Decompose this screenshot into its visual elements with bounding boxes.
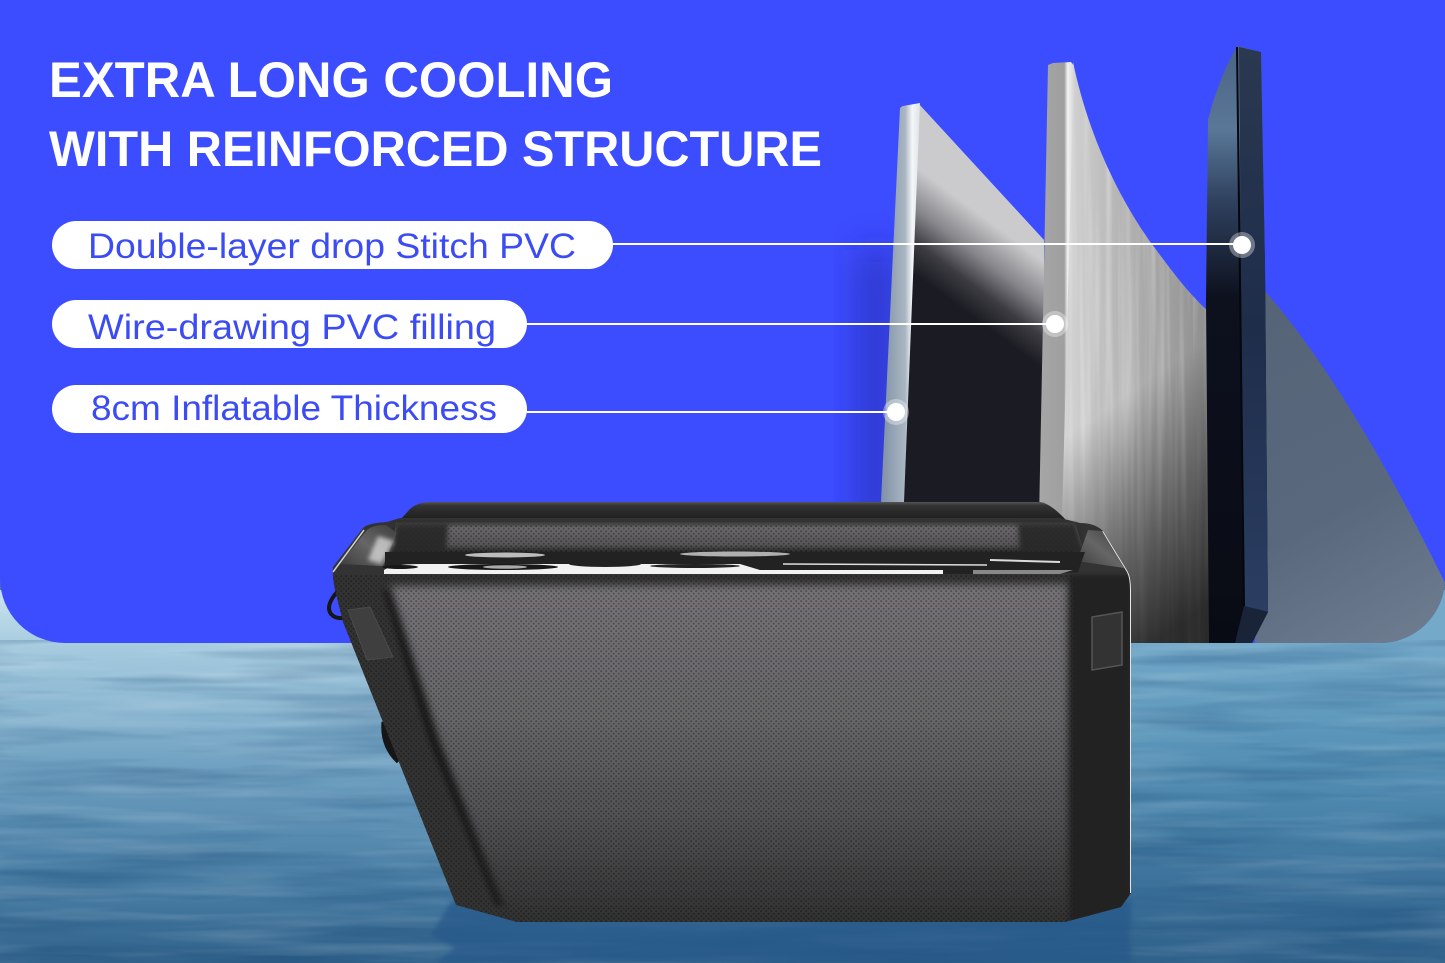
side patch left: [348, 607, 393, 660]
groove on the left side: [383, 590, 510, 905]
inner back wall: [392, 522, 1084, 552]
reflection of the cooler in the water: [431, 900, 1131, 963]
right side shade: [1070, 575, 1132, 925]
cooler surfaces: [330, 531, 1132, 925]
layer: wire-drawing PVC filling: [1039, 60, 1210, 645]
callout: 8cm inflatable thickness: [52, 385, 909, 433]
side strap: [386, 722, 400, 760]
water in the cooler: [382, 552, 1085, 574]
callout: double-layer drop stitch PVC: Double-layer drop Stitch PVC: [88, 227, 576, 266]
body: [333, 518, 1131, 922]
strap loop: [329, 592, 345, 618]
title: WITH REINFORCED STRUCTURE: [49, 121, 822, 177]
right corner facet: [1077, 530, 1124, 568]
title: EXTRA LONG COOLING: [49, 52, 613, 108]
left corner facet: [340, 525, 397, 566]
rim right edge highlight: [1103, 531, 1131, 893]
left inner corner shade: [392, 524, 448, 552]
cooler box: [329, 502, 1132, 925]
blue panel: [0, 0, 1445, 643]
callout: wire-drawing PVC filling: [52, 300, 1068, 348]
callout: wire-drawing PVC filling: Wire-drawing PVC filling: [88, 308, 496, 347]
layer: inflatable thickness: [1206, 46, 1445, 643]
callout: double-layer drop stitch PVC: [52, 221, 1255, 269]
material layers: [862, 46, 1445, 645]
front panel: [390, 584, 1068, 920]
title: [49, 52, 822, 177]
back rim: [400, 502, 1066, 520]
left edge highlight: [333, 530, 364, 572]
water background: [0, 590, 1445, 963]
side patch right: [1092, 612, 1122, 670]
layer: drop stitch PVC sheet: [881, 103, 1044, 510]
woven texture: [330, 575, 1075, 925]
right inner corner shade: [1018, 524, 1084, 552]
callout: 8cm inflatable thickness: 8cm Inflatable Thickness: [91, 389, 497, 428]
